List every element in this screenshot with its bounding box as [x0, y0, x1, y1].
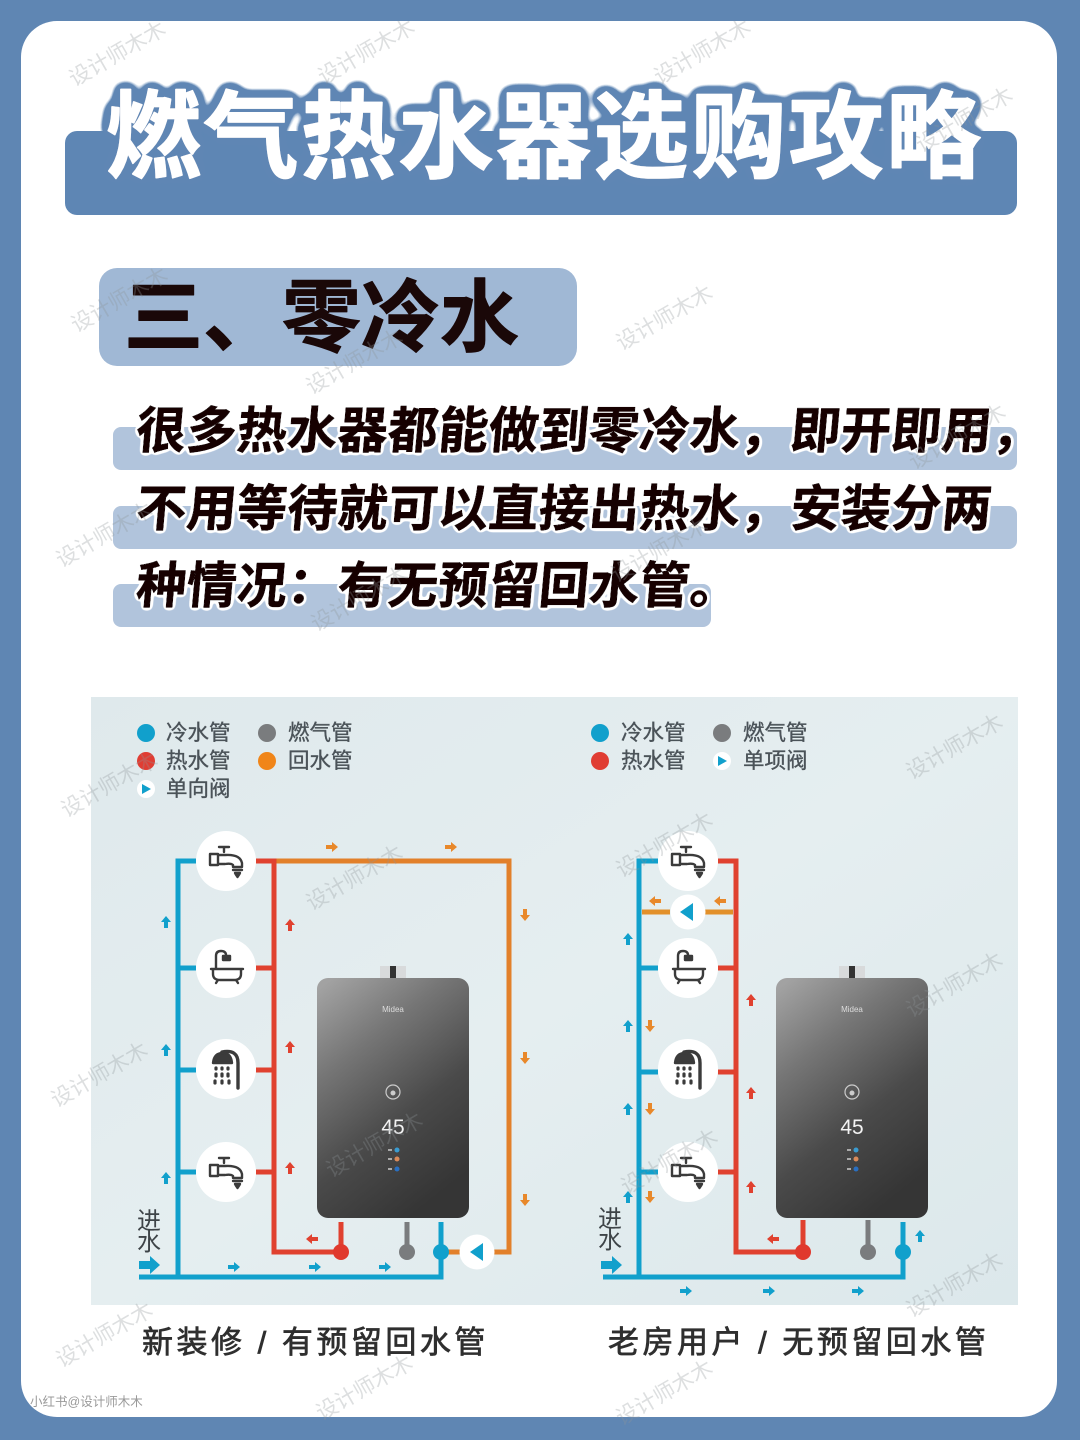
watermarks: 设计师木木	[902, 1248, 1007, 1322]
inlet label: right diagram	[598, 1206, 622, 1254]
watermarks: 设计师木木	[607, 513, 712, 587]
water heater: left diagram	[317, 966, 469, 1218]
watermarks: 设计师木木	[902, 710, 1007, 784]
section heading: zero cold water: 三、零冷水	[124, 273, 519, 362]
legend: left diagram: 回水管	[288, 749, 353, 773]
watermarks: 设计师木木	[905, 400, 1010, 474]
watermarks: 设计师木木	[47, 1038, 152, 1112]
source credit: 小红书@设计师木木	[30, 1394, 143, 1409]
watermarks: 设计师木木	[57, 748, 162, 822]
legend: right diagram: 单项阀	[743, 749, 808, 773]
water heater: left diagram: Midea	[382, 1005, 404, 1014]
pipes: left diagram	[139, 861, 509, 1277]
watermarks: 设计师木木	[902, 948, 1007, 1022]
watermarks: 设计师木木	[65, 17, 170, 91]
intro paragraph	[113, 403, 1045, 627]
check valve	[460, 1234, 494, 1270]
watermarks: 设计师木木	[612, 281, 717, 355]
inlet label: right diagram: 进	[598, 1206, 622, 1233]
watermarks: 设计师木木	[302, 325, 407, 399]
watermarks: 设计师木木	[612, 808, 717, 882]
intro paragraph: 种情况：有无预留回水管。	[134, 558, 743, 614]
fixtures: left diagram	[196, 831, 256, 1202]
watermarks: 设计师木木	[52, 498, 157, 572]
inlet label: left diagram	[137, 1208, 161, 1256]
watermarks: 设计师木木	[67, 263, 172, 337]
pipes: right diagram	[603, 861, 911, 1277]
title: 燃气热水器选购攻略	[106, 85, 984, 191]
water heater: right diagram: 45	[840, 1116, 864, 1139]
legend: right diagram	[591, 721, 808, 773]
legend: left diagram	[137, 721, 353, 801]
flow arrows: right diagram	[601, 896, 925, 1296]
fixtures: right diagram	[658, 831, 718, 1202]
diagram panel background	[91, 697, 1018, 1305]
watermarks: 设计师木木	[912, 83, 1017, 157]
watermarks: 设计师木木	[52, 1298, 157, 1372]
intro paragraph: 很多热水器都能做到零冷水，即开即用，	[134, 403, 1045, 459]
flow arrows: left diagram	[139, 842, 530, 1274]
watermarks: 设计师木木	[312, 1351, 417, 1425]
inlet label: right diagram: 水	[598, 1227, 622, 1254]
legend: left diagram: 冷水管	[166, 721, 231, 745]
water heater: right diagram	[776, 966, 928, 1218]
diagram: no return pipe	[591, 721, 989, 1360]
legend: left diagram: 单向阀	[166, 777, 231, 801]
watermarks: 设计师木木	[307, 562, 412, 636]
caption: right diagram: 老房用户 / 无预留回水管	[608, 1325, 989, 1360]
water heater: right diagram: Midea	[841, 1005, 863, 1014]
legend: right diagram: 热水管	[621, 749, 686, 773]
legend: right diagram: 冷水管	[621, 721, 686, 745]
watermarks: 设计师木木	[612, 1356, 717, 1430]
caption: left diagram: 新装修 / 有预留回水管	[142, 1325, 489, 1360]
watermarks: 设计师木木	[650, 15, 755, 89]
legend: left diagram: 燃气管	[288, 721, 353, 745]
watermarks: 设计师木木	[314, 15, 419, 89]
diagram: with return pipe	[137, 721, 530, 1360]
watermarks: 设计师木木	[322, 1108, 427, 1182]
legend: right diagram: 燃气管	[743, 721, 808, 745]
inlet label: left diagram: 水	[137, 1229, 161, 1256]
water heater: left diagram: 45	[381, 1116, 405, 1139]
watermarks: 设计师木木	[617, 1125, 722, 1199]
intro paragraph: 不用等待就可以直接出热水，安装分两	[134, 481, 995, 537]
title bar	[65, 131, 1017, 215]
legend: left diagram: 热水管	[166, 749, 231, 773]
watermarks: 设计师木木	[302, 841, 407, 915]
check valve between pipes	[670, 894, 706, 930]
inlet label: left diagram: 进	[137, 1208, 161, 1235]
